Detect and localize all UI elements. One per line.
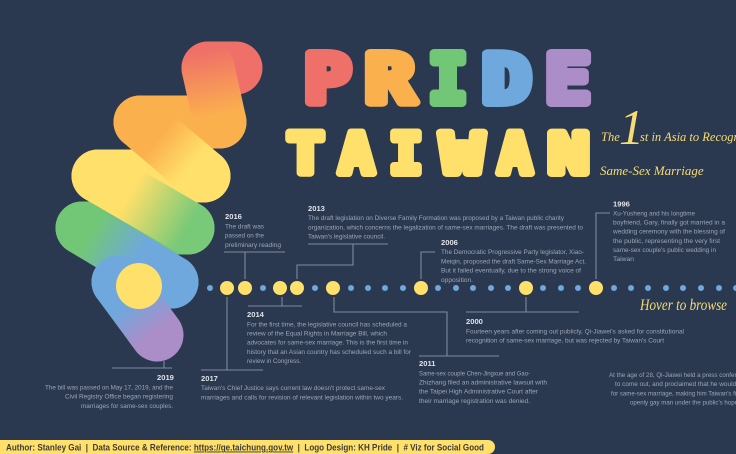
title: TAIWAN: A: [339, 122, 374, 186]
event 2014: history that an Asian country has scheduled such a bill for: [247, 349, 412, 356]
title: PRIDE: R: [365, 40, 416, 118]
event 2000: recognition of same-sex marriage, but was rejected by Taiwan's Court: [466, 338, 664, 345]
event 2000: 2000: [466, 317, 483, 326]
event 2016: preliminary reading: [225, 242, 281, 249]
event 2019: marriages for same-sex couples.: [81, 403, 173, 410]
title: PRIDE: [304, 40, 591, 118]
subtitle: Same-Sex Marriage: [600, 163, 704, 178]
event 2019: 2019: [157, 373, 174, 382]
event 2016: The draft was: [225, 223, 265, 230]
title: TAIWAN: I: [390, 122, 422, 186]
event 2011: Same-sex couple Chen-Jingxue and Gao-: [419, 370, 530, 378]
title: TAIWAN: A: [498, 122, 532, 186]
event 1996: Taiwan: [613, 256, 634, 263]
event 2014: review in Congress.: [247, 358, 301, 365]
event 2006: [441, 238, 586, 284]
event 2016: 2016: [225, 212, 242, 221]
subtitle: The: [601, 130, 620, 144]
title: PRIDE: P: [304, 40, 351, 118]
event 2000: Fourteen years after coming out publicly, Qi-Jiawei's asked for constitutional: [466, 328, 684, 336]
event 2011: Zhizhang filed an administrative lawsuit with: [419, 380, 547, 387]
title: TAIWAN: [287, 122, 589, 186]
event 2011: the Taipei High Administrative Court after: [419, 389, 539, 396]
event 2014: For the first time, the legislative council has scheduled a: [247, 322, 407, 328]
title: TAIWAN: T: [287, 122, 324, 186]
event 2019: [45, 373, 174, 410]
event 2006: 2006: [441, 238, 458, 247]
event 1996: wedding ceremony with the blessing of: [612, 229, 725, 236]
event 1996: the public, representing the very first: [613, 238, 720, 245]
event 2006: Meiqin, proposed the draft Same-Sex Marriage Act.: [441, 258, 586, 265]
subtitle: [600, 99, 736, 178]
event 1996: [612, 200, 725, 263]
event 2019: The bill was passed on May 17, 2019, and the: [45, 384, 173, 392]
event 2006: opposition.: [441, 277, 473, 284]
event 2006: But it failed eventually, due to the strong voice of: [441, 268, 581, 275]
title: PRIDE: D: [482, 40, 531, 118]
title: TAIWAN: W: [441, 122, 484, 186]
timeline dots: [207, 281, 736, 295]
event 2019: Civil Registry Office began registering: [65, 394, 173, 401]
event 2017: [201, 374, 403, 401]
event 2013: The draft legislation on Diverse Family Formation was proposed by a Taiwan public charity: [308, 215, 565, 222]
title: TAIWAN: N: [548, 122, 589, 186]
event 2017: 2017: [201, 374, 218, 383]
event 2000: [466, 317, 684, 345]
event 2016: passed on the: [225, 233, 264, 240]
event 2013: [308, 204, 583, 241]
event 1996: Xu-Yusheng and his longtime: [613, 210, 695, 218]
connector lines: [112, 213, 610, 370]
title: PRIDE: E: [545, 40, 591, 118]
event 2014: advocates for same-sex marriage. This is the first time in: [247, 340, 408, 347]
event 2013: 2013: [308, 204, 325, 213]
event 2016: [225, 212, 281, 249]
event 2014: [247, 310, 412, 365]
title: PRIDE: I: [428, 40, 468, 118]
event 1996: same-sex couple's public wedding in: [613, 247, 716, 254]
event 2011: [419, 359, 547, 405]
event 2017: marriages and calls for revision of relevant legislation within two years.: [201, 394, 403, 401]
footer bar: [0, 440, 495, 454]
rainbow ribbon logo: [82, 68, 236, 335]
event 2013: organization, which concerns the legalization of same-sex marriages. The draft was presented to: [308, 224, 583, 232]
event 2014: review of the Equal Rights in Marriage Bill, which: [247, 331, 387, 338]
event 1996: boyfriend, Gary, finally got married in a: [613, 220, 725, 227]
subtitle: 1: [619, 99, 644, 155]
event 2014: 2014: [247, 310, 265, 319]
event 2006: The Democratic Progressive Party legislator, Xiao-: [441, 249, 584, 256]
footer bar: Author: Stanley Gai | Data Source & Reference: https://ge.taichung.gov.tw | Logo Design: KH Pride | # Viz for Social Good: [6, 442, 484, 452]
event 2013: Taiwan's legislative council.: [308, 234, 385, 241]
event 2017: Taiwan's Chief Justice says current law doesn't protect same-sex: [201, 385, 386, 392]
event 2011: 2011: [419, 359, 436, 368]
event 1986 clipped text: [609, 372, 736, 407]
event 2011: their marriage registration was denied.: [419, 398, 530, 405]
event 1996: 1996: [613, 200, 630, 208]
